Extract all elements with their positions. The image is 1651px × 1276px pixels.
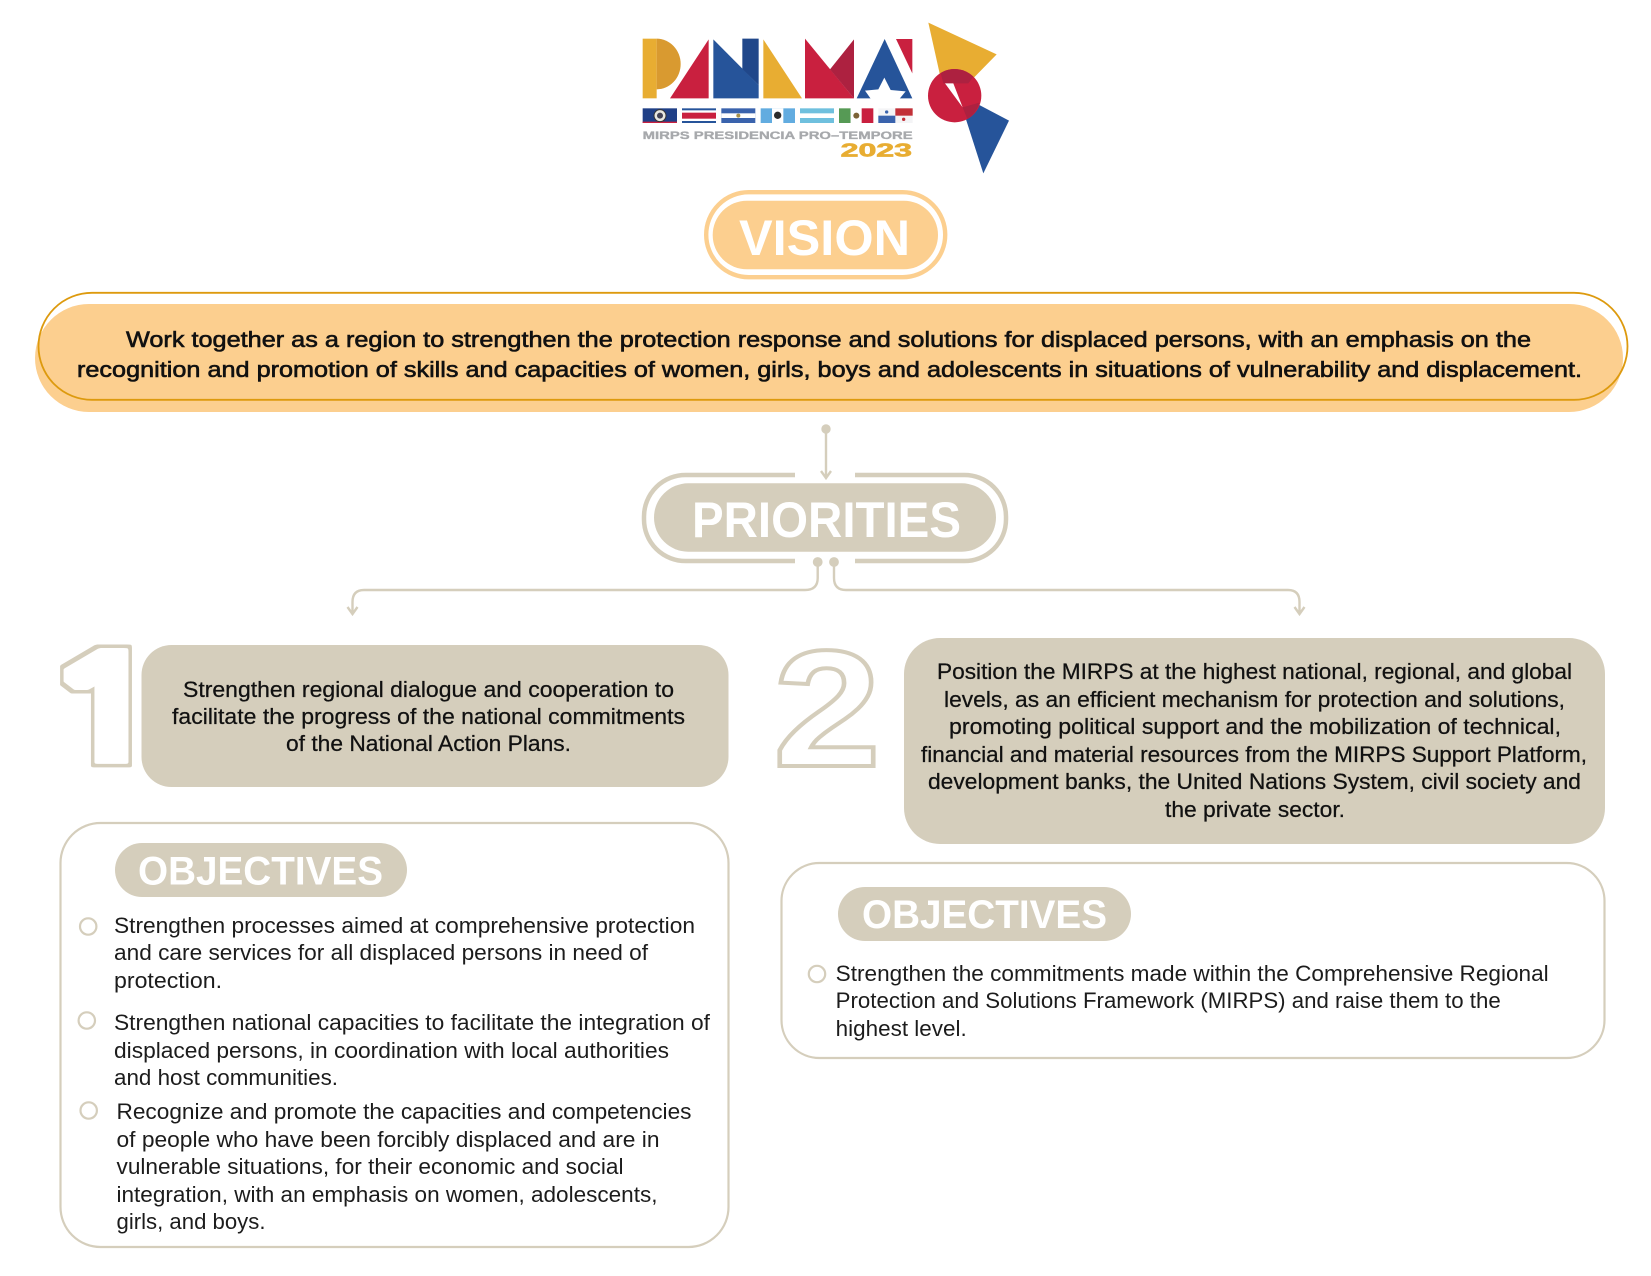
panel: priority 1 bbox=[142, 645, 728, 787]
priority 1 text: of the National Action Plans. bbox=[286, 731, 571, 756]
logo wordmark shapes bbox=[643, 39, 912, 99]
priority 1 text: facilitate the progress of the national commitments bbox=[172, 704, 685, 729]
panel: objectives of priority 1 bbox=[60, 823, 728, 1247]
objective 1.3: vulnerable situations, for their economic and social bbox=[116, 1154, 624, 1179]
heading: priorities: PRIORITIES bbox=[692, 492, 961, 548]
objective 1.3: integration, with an emphasis on women, adolescents, bbox=[116, 1182, 658, 1207]
number 2: 2 bbox=[773, 617, 881, 802]
heading: priorities bbox=[644, 475, 1006, 561]
objective 2.1: Strengthen the commitments made within the Comprehensive Regional bbox=[836, 961, 1549, 986]
panel: priority 2 bbox=[904, 638, 1605, 844]
panel: vision statement bbox=[35, 293, 1628, 412]
objective 2.1 bbox=[809, 961, 1549, 1041]
panel: objectives of priority 2 bbox=[782, 863, 1604, 1058]
arrow: vision to priorities bbox=[821, 426, 831, 478]
priority 2 text: Position the MIRPS at the highest national, regional, and global bbox=[937, 659, 1572, 684]
objectives heading 1: OBJECTIVES bbox=[138, 850, 383, 894]
objective 1.1: protection. bbox=[114, 968, 222, 993]
objective 1.2: Strengthen national capacities to facilitate the integration of bbox=[114, 1010, 711, 1035]
vision statement text bbox=[77, 327, 1582, 382]
objective 2.1: highest level. bbox=[836, 1016, 967, 1041]
objective 2.1: Protection and Solutions Framework (MIRPS) and raise them to the bbox=[836, 988, 1501, 1013]
vision statement text: recognition and promotion of skills and capacities of women, girls, boys and adolescents in situations of vulnerability and displacement. bbox=[77, 357, 1582, 382]
objective 1.3: Recognize and promote the capacities and competencies bbox=[116, 1099, 692, 1124]
priority 2 text: financial and material resources from the MIRPS Support Platform, bbox=[921, 742, 1587, 767]
number 1: 1 bbox=[41, 642, 172, 779]
objectives heading 2: OBJECTIVES bbox=[862, 893, 1107, 937]
logo flags bbox=[643, 108, 913, 123]
priority 2 text bbox=[921, 659, 1587, 822]
objective 1.2: displaced persons, in coordination with local authorities bbox=[114, 1038, 669, 1063]
priority 2 text: promoting political support and the mobilization of technical, bbox=[949, 714, 1561, 739]
objective 1.2 bbox=[79, 1010, 711, 1090]
logo: Panama MIRPS presidency 2023 bbox=[643, 23, 1009, 173]
arrow: priorities to priority 1 bbox=[348, 558, 821, 614]
priority 2 text: levels, as an efficient mechanism for protection and solutions, bbox=[944, 687, 1565, 712]
priority 1 text: Strengthen regional dialogue and cooperation to bbox=[183, 677, 674, 702]
logo emblem bbox=[928, 23, 1009, 173]
objective 1.1 bbox=[80, 913, 695, 993]
priority 2 text: the private sector. bbox=[1165, 797, 1345, 822]
objective 1.1: Strengthen processes aimed at comprehensive protection bbox=[114, 913, 695, 938]
objective 1.1: and care services for all displaced persons in need of bbox=[114, 940, 649, 965]
logo year: 2023 bbox=[841, 139, 912, 160]
heading: vision: VISION bbox=[739, 210, 910, 266]
objective 1.2: and host communities. bbox=[114, 1065, 338, 1090]
priority 2 text: development banks, the United Nations System, civil society and bbox=[928, 769, 1581, 794]
objective 1.3 bbox=[80, 1099, 692, 1234]
priority 1 text bbox=[172, 677, 685, 756]
heading: vision bbox=[706, 192, 945, 277]
objective 1.3: girls, and boys. bbox=[116, 1209, 266, 1234]
logo caption: MIRPS PRESIDENCIA PRO–TEMPORE bbox=[643, 130, 913, 142]
objective 1.3: of people who have been forcibly displaced and are in bbox=[116, 1127, 660, 1152]
vision statement text: Work together as a region to strengthen the protection response and solutions for displaced persons, with an emphasis on the bbox=[126, 327, 1531, 352]
arrow: priorities to priority 2 bbox=[830, 558, 1304, 614]
